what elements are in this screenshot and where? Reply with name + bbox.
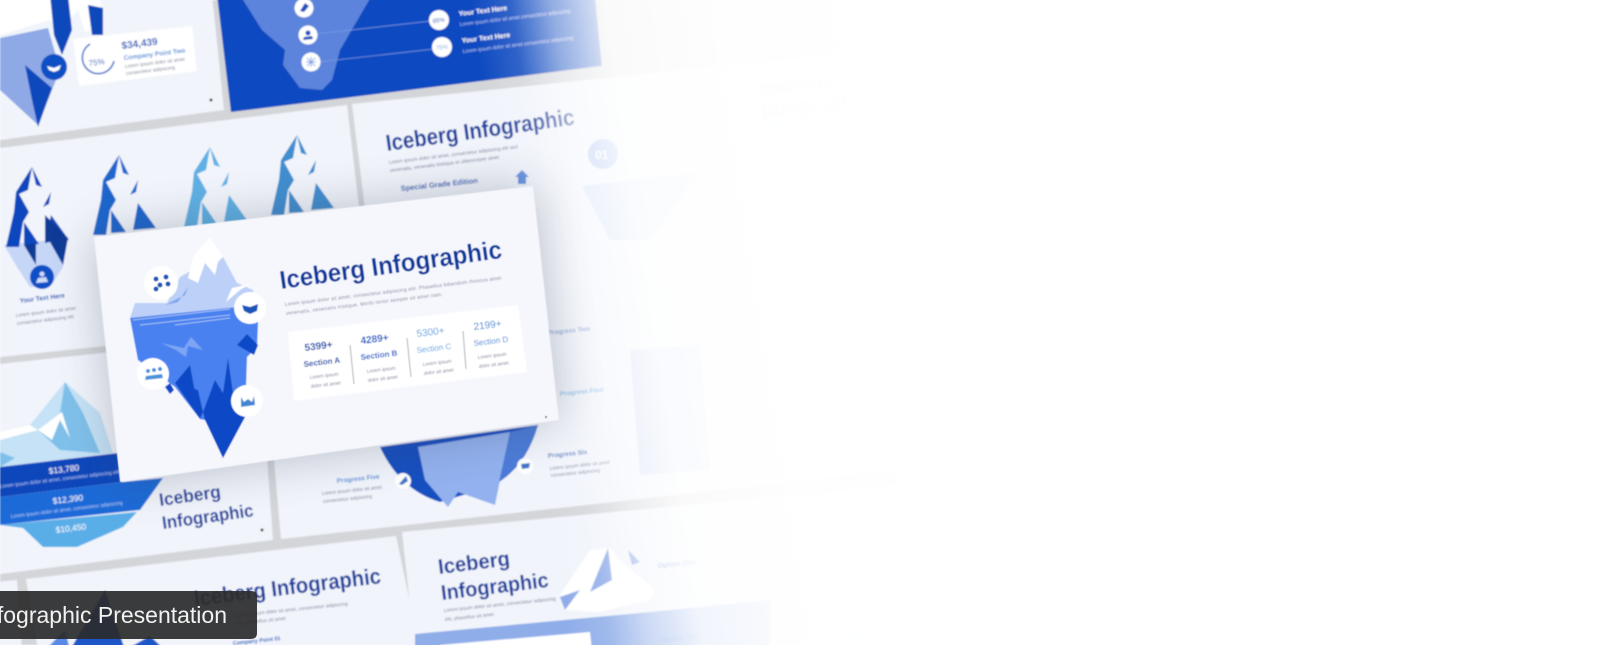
panel: bottom slide two: Infographic bbox=[440, 569, 550, 605]
panel: progress iceberg slide: consectetur adipiscing bbox=[551, 468, 601, 479]
card: company point two bbox=[73, 26, 197, 86]
stat: section A: dolor sit amet bbox=[311, 380, 342, 390]
panel: blue progress slide: Your Text Here bbox=[458, 5, 508, 18]
card: company point two: $34,439 bbox=[121, 37, 159, 52]
card: company point two: Lorem ipsum dolor sit amet bbox=[125, 57, 186, 70]
description: venenatis, venenatis tristique. Morbi tortor semper sit amet nam. bbox=[286, 292, 443, 317]
stat: section B: Section B bbox=[360, 349, 398, 362]
panel: progress iceberg slide: Progress Five bbox=[336, 473, 380, 485]
panel: bottom slide two: elit, phasellus sit amet bbox=[445, 612, 495, 623]
stat: section A: Section A bbox=[303, 356, 341, 369]
title: Iceberg Infographic bbox=[278, 236, 504, 295]
pyramid bands: Lorem ipsum dolor sit amet, consectetur adipiscing elit bbox=[0, 469, 120, 490]
card: company point two: 75% bbox=[88, 57, 105, 68]
panel: bottom slide one: Iceberg Infographic bbox=[193, 563, 382, 611]
panel: special grade slide: Lorem ipsum dolor sit amet, consectetur adipiscing elit sed bbox=[389, 144, 518, 166]
icebergs bbox=[6, 135, 334, 247]
iceberg illustration bbox=[130, 237, 266, 458]
iceberg tip bbox=[0, 382, 113, 467]
panel: special grade slide: venenatis, venenatis tristique et ullamcorper amet bbox=[390, 155, 500, 174]
panel: pyramid iceberg slide bbox=[0, 336, 273, 574]
badge: 01: 01 bbox=[595, 148, 609, 162]
stat: section C: Lorem ipsum bbox=[423, 359, 452, 368]
panel: special grade slide: Iceberg Infographic bbox=[384, 104, 576, 156]
panel: bottom slide one: elit, phasellus sit amet bbox=[237, 616, 287, 627]
iceberg small bbox=[415, 600, 770, 645]
stat: section C: Section C bbox=[416, 342, 452, 355]
panel: progress iceberg slide: Progress Two bbox=[547, 326, 591, 337]
icon: badges bbox=[395, 458, 533, 489]
card: company point two: Company Point Two bbox=[123, 47, 186, 62]
ghost slide on far right: Infographic bbox=[761, 88, 872, 123]
icon: team badge bbox=[137, 358, 169, 390]
iceberg bottom bbox=[380, 425, 538, 502]
panel: blue progress slide: 75% bbox=[436, 44, 449, 52]
panel: blue progress slide: Lorem ipsum dolor sit amet consectetur adipiscing bbox=[460, 8, 571, 28]
panel: progress iceberg slide: Progress Six bbox=[547, 449, 588, 460]
stat: section D bbox=[473, 319, 510, 370]
panel: blue progress slide: Lorem ipsum dolor sit amet consectetur adipiscing bbox=[463, 35, 574, 55]
panel: progress iceberg slide: Progress Four bbox=[559, 386, 605, 398]
panel: four icebergs slide: Lorem ipsum dolor sit amet bbox=[16, 306, 77, 319]
panel: progress iceberg slide: consectetur adipiscing bbox=[323, 494, 373, 505]
stat: section A bbox=[303, 340, 342, 390]
background slide wall bbox=[0, 0, 920, 645]
stat: section D: 2199+ bbox=[473, 319, 502, 333]
stat: section D: dolor sit amet bbox=[479, 360, 510, 370]
panel: progress iceberg slide: Lorem ipsum dolor sit amet bbox=[322, 485, 383, 497]
stats panel bbox=[288, 305, 527, 401]
stat: section A: 5399+ bbox=[304, 340, 333, 354]
title: Infographic bbox=[161, 500, 255, 533]
icon: chart badge bbox=[231, 385, 263, 417]
ghost slide on far right bbox=[630, 70, 872, 475]
panel: bottom slide one: Lorem ipsum dolor sit amet, consectetur adipiscing bbox=[236, 601, 348, 619]
stat: section B bbox=[360, 333, 399, 384]
panel: progress iceberg slide bbox=[263, 270, 900, 539]
pyramid bands bbox=[0, 453, 163, 547]
panel: bottom slide two: Lorem ipsum dolor sit amet, consectetur adipiscing bbox=[444, 596, 556, 614]
iceberg above water bbox=[130, 257, 258, 318]
panel: four icebergs slide: consectetur adipiscing elit bbox=[17, 314, 75, 327]
pyramid bands: $12,390 bbox=[52, 492, 84, 506]
panel: bottom slide two: Option Two bbox=[661, 633, 700, 644]
icon: handshake badge bbox=[41, 54, 67, 80]
panel: bottom slide one bbox=[0, 536, 420, 645]
panel: progress iceberg slide: Lorem ipsum dolor sit amet bbox=[550, 460, 611, 472]
stat: section B: 4289+ bbox=[360, 333, 389, 347]
panel: special grade slide: Special Grade Edition bbox=[400, 176, 479, 193]
panel: bottom slide two: Iceberg bbox=[437, 547, 511, 579]
panel: bottom slide two: Option One bbox=[657, 559, 696, 570]
title bbox=[158, 482, 255, 533]
pyramid bands: Lorem ipsum dolor sit amet, consectetur adipiscing bbox=[11, 500, 123, 520]
stat: section C bbox=[416, 326, 455, 377]
panel: bottom slide two bbox=[402, 485, 920, 645]
panel: four icebergs slide: Your Text Here bbox=[19, 292, 66, 305]
progress rows bbox=[315, 20, 443, 62]
description: Lorem ipsum dolor sit amet, consectetur adipiscing elit. Phasellus bibendum rhoncus amet bbox=[285, 275, 502, 308]
panel: iceberg slide top left bbox=[0, 0, 224, 140]
title: Iceberg bbox=[158, 482, 222, 510]
stat: section C: 5300+ bbox=[416, 326, 445, 340]
caption label bbox=[0, 591, 257, 639]
stat: section C: dolor sit amet bbox=[424, 367, 455, 377]
iceberg below water bbox=[130, 305, 258, 458]
icon: people badge bbox=[30, 265, 54, 289]
stat: section A: Lorem ipsum bbox=[310, 372, 339, 381]
stat: section D: Section D bbox=[473, 335, 509, 348]
badge: 01 bbox=[588, 139, 618, 169]
panel: main iceberg slide bbox=[94, 186, 559, 482]
main card shadow bbox=[94, 186, 559, 482]
panel: blue progress slide: Your Text Here bbox=[461, 32, 511, 45]
pyramid bands: $10,450 bbox=[55, 521, 87, 535]
panel: blue progress slide: 65% bbox=[433, 17, 446, 25]
pyramid bands: $13,780 bbox=[48, 462, 80, 476]
card: company point two: consectetur adipiscing bbox=[126, 65, 176, 77]
panel: four icebergs slide bbox=[0, 105, 372, 357]
stat: section B: Lorem ipsum bbox=[367, 366, 396, 375]
panel: special grade slide bbox=[352, 50, 905, 330]
stat: section D: Lorem ipsum bbox=[478, 352, 507, 361]
icon: molecule badge bbox=[144, 266, 178, 300]
panel: blue progress slide bbox=[217, 0, 602, 112]
icon: handshake badge bbox=[234, 292, 266, 324]
ghost slide on far right: Iceberg bbox=[758, 70, 831, 101]
stat: section B: dolor sit amet bbox=[368, 374, 399, 384]
